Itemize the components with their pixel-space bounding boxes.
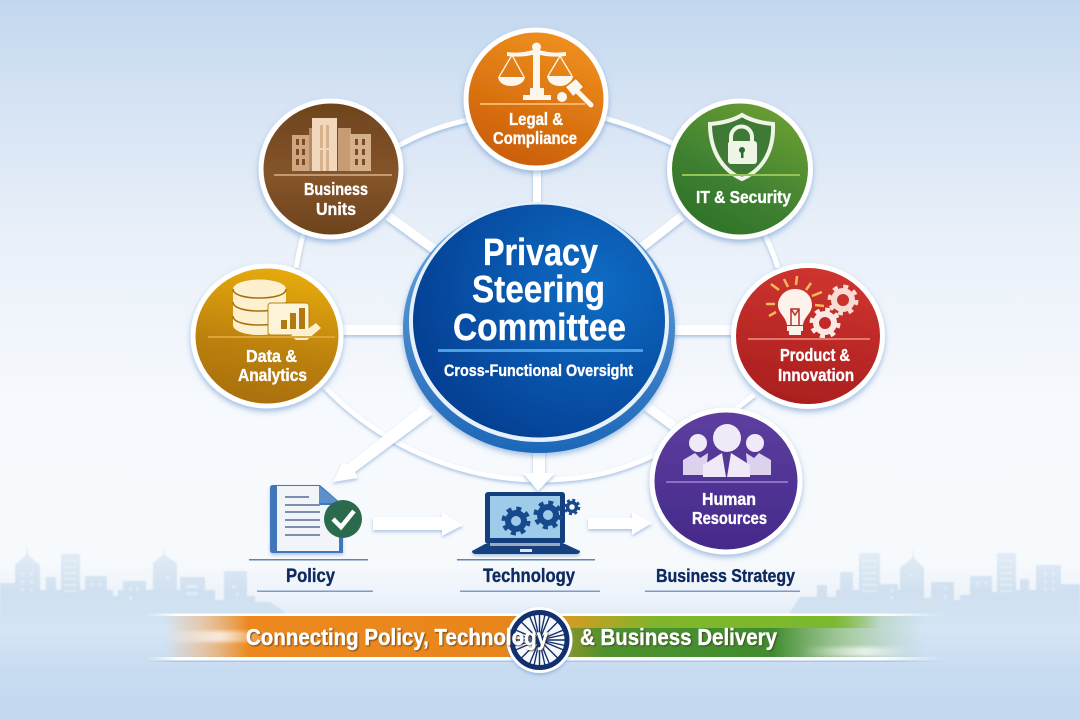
policy block [249, 485, 373, 592]
arrow: technology to business strategy [588, 512, 652, 535]
label: IT & Security [696, 187, 791, 207]
banner slogan: Connecting Policy, Technology [246, 624, 548, 650]
icon: document with check [270, 485, 362, 553]
technology block [457, 492, 600, 592]
skyline left [0, 545, 285, 625]
label: Units [316, 199, 356, 219]
label: Innovation [778, 365, 854, 385]
node: business units [261, 101, 401, 237]
label: Resources [692, 508, 767, 528]
banner slogan: & Business Delivery [580, 624, 777, 650]
arrow: hub to technology [523, 450, 555, 491]
label [493, 109, 577, 148]
hub subtitle: Cross-Functional Oversight [444, 361, 633, 380]
emblem: ashoka chakra [506, 607, 572, 673]
label: Compliance [493, 128, 577, 148]
banner slogan [246, 624, 777, 650]
icon: light bulb and gears [766, 276, 856, 336]
label: Analytics [238, 365, 307, 385]
label: Data & [246, 346, 297, 366]
label [778, 345, 854, 385]
label: Human [702, 489, 756, 509]
skyline right [790, 546, 1080, 625]
label: Product & [780, 345, 850, 365]
label [692, 489, 767, 528]
hub: privacy steering committee [403, 202, 675, 453]
spokes from hub to departments [340, 165, 736, 428]
node: data and analytics [193, 266, 341, 406]
connecting ring arcs [296, 118, 778, 480]
label: Technology [483, 566, 575, 587]
icon: scales and gavel [498, 42, 591, 105]
arrow: policy to technology [373, 512, 463, 536]
label [238, 346, 307, 385]
icon: shield with padlock [710, 115, 773, 179]
hub title: Committee [453, 307, 626, 349]
banner ribbon [145, 614, 945, 660]
icon: database and chart [233, 280, 321, 340]
label [304, 179, 368, 219]
hub title: Privacy [483, 232, 598, 274]
arrow: hub to policy [333, 405, 433, 482]
node: legal and compliance [466, 30, 606, 168]
icon: office buildings [292, 118, 371, 171]
node: product and innovation [734, 266, 882, 406]
label: Business [304, 179, 368, 199]
business strategy block: Business Strategy [656, 566, 795, 586]
node: human resources [652, 410, 800, 552]
icon: three people [683, 424, 771, 477]
hub title [453, 232, 626, 349]
icon: laptop with gears [472, 492, 580, 554]
hub title: Steering [472, 269, 605, 311]
label: Legal & [509, 109, 563, 129]
node: it and security [670, 101, 810, 237]
label: Policy [286, 566, 335, 587]
